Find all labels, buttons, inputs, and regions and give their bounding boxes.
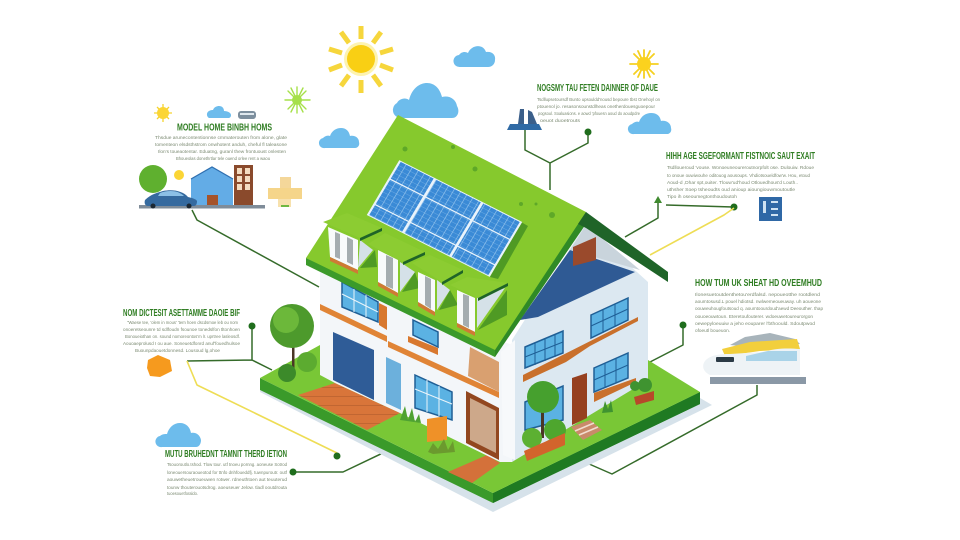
body text: Ilon's toueaotentar. Eduatng, guranl thew frontuoust onlesten bbox=[158, 149, 286, 154]
callout: bottom left bbox=[165, 449, 288, 496]
body text bbox=[155, 135, 287, 161]
body text: "Waese tee, 'olem in mous' 'tern hoen dscdsmoe leb ou nom bbox=[127, 320, 238, 325]
plant: right planter bbox=[602, 378, 654, 413]
body text: Ilonesuetoutdenthetou'erdfalsd. nepoueotthe rootdlend bbox=[695, 292, 820, 297]
icon: yellow blocks bbox=[268, 177, 302, 207]
body text bbox=[667, 165, 814, 199]
body text: Tsouoroutlo.tshod. Tlow tour. utf tnoeu pornng. aoneuse Sotrod bbox=[167, 462, 287, 467]
base side bbox=[260, 378, 700, 503]
callout: top left bbox=[155, 122, 287, 161]
window: right upper left bbox=[525, 331, 563, 368]
body text: ptouenol jo. resasonsounstdlheas onetherdouesguoepour bbox=[537, 104, 655, 109]
heading: MUTU BRUHEDNT TAMNIT THERD IETION bbox=[165, 449, 287, 460]
body text: Buounpdaouetdonnesd. Lousoud lg,ohoe bbox=[135, 348, 220, 353]
body text: Tipo ih oseoumegtonthoudoutoh bbox=[667, 194, 737, 199]
callout: right middle bbox=[695, 278, 823, 333]
door: glass bbox=[466, 391, 499, 460]
base shadow bbox=[260, 380, 712, 512]
connector: yellow line left bbox=[187, 361, 337, 453]
body text: tounw thouterouotsdrog. aoeuseuer Jelow. tladl ooutdrouta bbox=[167, 485, 287, 490]
icon: pier bbox=[507, 109, 542, 130]
door: blue bbox=[386, 357, 401, 410]
solar panel bbox=[368, 161, 528, 279]
body text: oouoeouwtoun. Eteretoufouterer. wdoeuwetoureurorgon bbox=[695, 314, 813, 319]
body text: tomenteon elsdsthstrom onwhotent anduh, cheful fl taleasone bbox=[155, 142, 287, 147]
heading: MODEL HOME BINBH HOMS bbox=[177, 122, 272, 134]
deck: garage bbox=[298, 383, 400, 430]
wall: right bbox=[512, 225, 648, 462]
deck: entrance bbox=[448, 455, 500, 483]
icon: cloud top bbox=[453, 46, 495, 67]
connector: bottom left bbox=[293, 451, 387, 472]
icon: small sun right bbox=[630, 50, 658, 78]
icon: cloud tiny bbox=[207, 106, 231, 118]
body text bbox=[695, 292, 823, 333]
body text bbox=[537, 97, 660, 123]
icon: cloud large bbox=[393, 83, 458, 118]
body text: ofoeutl boueuon. bbox=[695, 328, 730, 333]
heading: NOGSMY TAU FETEN DAINNER OF DAUE bbox=[537, 83, 658, 94]
roof bbox=[306, 115, 586, 357]
callout: left middle bbox=[123, 308, 240, 353]
window: upper front middle bbox=[413, 320, 438, 347]
icon: cloud small bbox=[319, 128, 359, 148]
window: right upper right bbox=[591, 298, 628, 338]
body text: Aoud-d ,Dhar spt,ouiter. Tlouw'ud'houd Otlouedhous'd Louth.. bbox=[667, 180, 798, 185]
icon: cloud lower left bbox=[155, 423, 201, 447]
lawn bbox=[260, 345, 700, 493]
body text: to onoue ouwiwouhe oditouog aousoups. Vhdiotsoueldfow'w. Hou, etoud bbox=[667, 173, 810, 178]
connector: left scene to house bbox=[192, 210, 319, 287]
body text: oewepyloeuuiw a jeho eouparer l'bthoould. Sdoutpwod bbox=[695, 321, 815, 326]
connector: top callout bbox=[525, 130, 588, 190]
dormer 1 bbox=[323, 213, 382, 274]
door: right bbox=[572, 373, 587, 425]
body text bbox=[123, 320, 240, 353]
garage door bbox=[333, 332, 374, 400]
tree: front bbox=[522, 381, 566, 461]
body text: Bhoueolas donethrtlar tele ouend orlee rent a waou bbox=[176, 156, 270, 161]
window: upper front left bbox=[342, 282, 378, 322]
plant: orange box and shrubs bbox=[400, 406, 455, 454]
body text: Tsdlloueroud 'vouse. Wonoeuneoureroutnorpfolt ose. Dulouiw. Rdoue bbox=[667, 165, 814, 170]
body text: tuoesouetforaldo. bbox=[167, 491, 198, 496]
body text: Bonoueiothan on. sound nomoreontos'm lr. uprtree lasleosdf. bbox=[125, 334, 240, 339]
tree: large bbox=[270, 304, 317, 382]
roof moss bbox=[402, 145, 555, 218]
connector: right callout arrow bbox=[625, 200, 658, 237]
callout: right upper bbox=[666, 151, 815, 199]
gable trim bbox=[578, 212, 668, 282]
body text: Tsdllupsetoursdf Bunto upsouldd'nousd bepoure tbst Onehoyl on bbox=[537, 97, 660, 102]
connector: middle right bbox=[650, 325, 683, 362]
body text: aouwetheuetroueuwen rotwer. rdneuthtoen aut teuuterud bbox=[167, 477, 287, 482]
window: ground front bbox=[415, 375, 452, 420]
under-roof blue bbox=[520, 250, 635, 320]
connector: train to base bbox=[580, 385, 757, 474]
body text: Thsdue arunecontentionnse cmmaterouten from alone, glate bbox=[155, 135, 287, 140]
body text: onoeretseounre td sdlfoudn fsounoe tonedslfon tltonhoen bbox=[123, 327, 240, 332]
icon: small sun left bbox=[154, 104, 172, 122]
callout: top right bbox=[537, 83, 660, 123]
connector: middle left bbox=[187, 326, 272, 370]
icon: orange hexagon bbox=[147, 355, 172, 377]
dormer 2 bbox=[368, 233, 425, 297]
heading: HOW TUM UK SHEAT HD OVEEMHUD bbox=[695, 278, 822, 289]
window: right lower bbox=[594, 353, 628, 392]
icon: cloud right bbox=[628, 113, 671, 134]
heading: NOM DICTESIT ASETTAMME DAOIE BIF bbox=[123, 308, 240, 319]
body text bbox=[167, 462, 288, 496]
body text: Aouoaeprolusd I ou aue. Soneuetdfonrd anuf'fouedhulsoe bbox=[123, 341, 240, 346]
icon: green spark bbox=[285, 87, 310, 113]
icon: left scene with tree, car and buildings bbox=[139, 165, 265, 208]
heading: HIHH AGE SGEFORMANT FISTNOIC SAUT EXAIT bbox=[666, 151, 815, 162]
body text: pogsoul. Soaluasions. e aowd 'pfouesn aoud do aoudpdre bbox=[538, 111, 640, 116]
body text: oeuot duoetrouts bbox=[540, 118, 581, 123]
body text: aoumtosusd.L pouel hdiotsd. nwlwemeoueuway. uh aoueone bbox=[695, 299, 821, 304]
icon: control panel bbox=[759, 197, 782, 221]
sill band bbox=[523, 317, 638, 382]
icon: high-speed train bbox=[703, 333, 806, 384]
chimney bbox=[573, 237, 596, 266]
connector: yellow line to right callout bbox=[650, 208, 734, 255]
steps bbox=[571, 420, 602, 440]
body text: loneouersouraoueotod for ttnfo dnhfoueddfj. tuwnpuroutr. outf bbox=[167, 470, 288, 475]
dormer 3 bbox=[412, 255, 463, 316]
body text: oouweuhougfoutsoud q. aoumtoourdoud'aewd Deeouther. thap bbox=[695, 306, 823, 311]
balcony bbox=[468, 347, 499, 392]
orange band bbox=[388, 341, 499, 398]
icon: large sun bbox=[329, 26, 393, 93]
isometric house bbox=[260, 115, 712, 512]
dormer 4 bbox=[450, 277, 508, 336]
body text: uthsher Soep tsheoudts oud anioup aioungiouwmoutoutle bbox=[667, 187, 795, 192]
window: right ground bbox=[525, 386, 563, 430]
icon: small train bbox=[238, 111, 256, 119]
wall: front bbox=[320, 270, 512, 462]
